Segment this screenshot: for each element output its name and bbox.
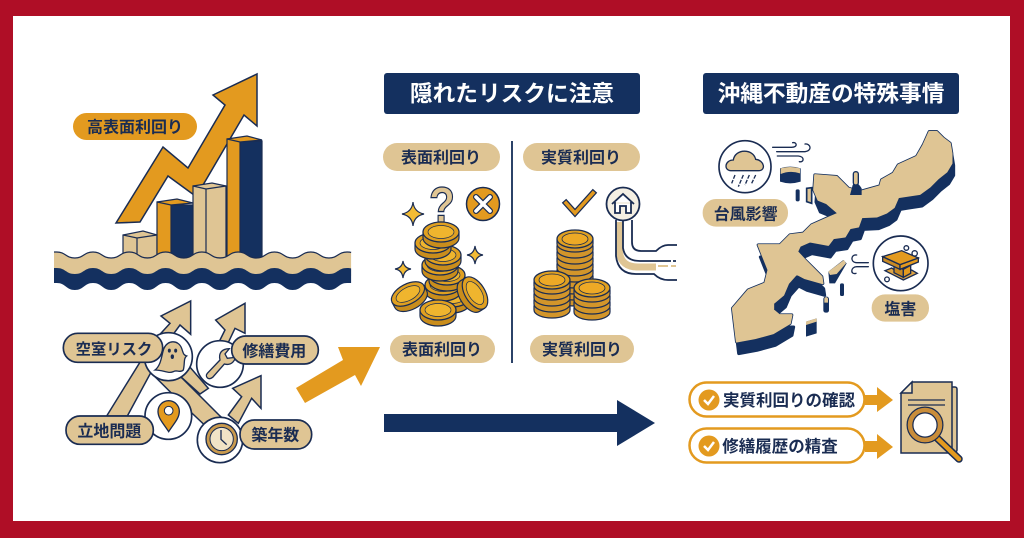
panel: real yield bbox=[523, 143, 678, 363]
check: confirm real yield bbox=[690, 382, 864, 416]
label: salt damage bbox=[872, 294, 929, 322]
divider bbox=[511, 141, 513, 363]
heading: hidden risks bbox=[384, 73, 640, 114]
icon: location pin bbox=[145, 393, 192, 439]
icon: wrench bbox=[197, 341, 243, 387]
heading: Okinawa circumstances: 沖縄不動産の特殊事情 bbox=[718, 80, 944, 106]
label: surface yield top bbox=[383, 143, 500, 171]
panel: surface yield bbox=[383, 143, 500, 363]
map: main island bbox=[733, 132, 952, 342]
label: typhoon bbox=[703, 199, 788, 227]
label: surface yield bottom bbox=[390, 335, 495, 363]
arrow: to document 2 bbox=[865, 434, 893, 459]
arrow: to document 1 bbox=[865, 387, 893, 412]
check: confirm real yield: 実質利回りの確認 bbox=[723, 391, 856, 410]
icon: salt damage bbox=[873, 236, 928, 291]
panel: checklist bbox=[690, 382, 959, 462]
icon: coin pile bbox=[387, 222, 493, 326]
label: vacancy risk bbox=[63, 333, 163, 362]
bar 2 bbox=[157, 199, 193, 258]
bar 4 bbox=[227, 136, 262, 258]
coin stack left bbox=[534, 271, 570, 318]
icon: clock bbox=[197, 417, 243, 463]
bar 3 bbox=[193, 183, 226, 258]
label: repair cost: 修繕費用 bbox=[242, 342, 306, 360]
check: inspect repair history bbox=[690, 428, 864, 462]
heading: hidden risks: 隠れたリスクに注意 bbox=[410, 80, 614, 106]
icon: wind bbox=[773, 143, 810, 162]
arrow: diagonal orange bbox=[296, 347, 380, 403]
coin stack back bbox=[557, 230, 593, 306]
icon: check mark bbox=[566, 193, 593, 213]
label: location problem: 立地問題 bbox=[77, 422, 141, 440]
label: surface yield bottom: 表面利回り bbox=[402, 341, 482, 359]
panel: hidden factors bbox=[63, 301, 318, 463]
label: typhoon: 台風影響 bbox=[714, 204, 778, 223]
icon: house badge bbox=[606, 188, 640, 220]
check: inspect repair history: 修繕履歴の精査 bbox=[722, 437, 838, 456]
icon: question mark: ? bbox=[429, 177, 455, 233]
arrow: navy horizontal bbox=[384, 400, 655, 446]
label: salt damage: 塩害 bbox=[884, 300, 916, 319]
panel: Okinawa map bbox=[703, 132, 954, 354]
map: main island shadow bbox=[735, 144, 954, 354]
icon: document with magnifier bbox=[901, 382, 959, 459]
label: building age bbox=[240, 420, 312, 449]
arrow: rising yield bbox=[116, 74, 257, 223]
label: vacancy risk: 空室リスク bbox=[76, 340, 152, 358]
map: small islands bbox=[780, 167, 862, 337]
label: real yield top bbox=[523, 143, 640, 171]
icon: ghost bbox=[144, 333, 192, 381]
label: location problem bbox=[66, 416, 153, 444]
label: real yield top: 実質利回り bbox=[541, 149, 621, 167]
waves bbox=[54, 252, 351, 290]
arrows: factors bbox=[107, 301, 261, 433]
label: high yield bbox=[73, 113, 197, 140]
panel: high yield chart bbox=[54, 74, 351, 290]
label: building age: 築年数 bbox=[251, 425, 299, 444]
icon: cross badge bbox=[466, 188, 500, 220]
label: high yield: 高表面利回り bbox=[87, 118, 183, 136]
icon: wind salt bbox=[852, 255, 868, 274]
icon: coin stacks bbox=[534, 230, 610, 320]
label: real yield bottom bbox=[530, 335, 634, 363]
label: repair cost bbox=[232, 336, 318, 364]
coin stack right bbox=[574, 279, 610, 320]
heading: Okinawa circumstances bbox=[703, 73, 959, 114]
icon: typhoon bbox=[719, 141, 771, 193]
bar 1 bbox=[123, 231, 157, 258]
icon: pipes bbox=[616, 220, 678, 280]
icon: sparkles bbox=[395, 202, 483, 278]
label: real yield bottom: 実質利回り bbox=[542, 341, 622, 359]
label: surface yield top: 表面利回り bbox=[401, 149, 481, 167]
